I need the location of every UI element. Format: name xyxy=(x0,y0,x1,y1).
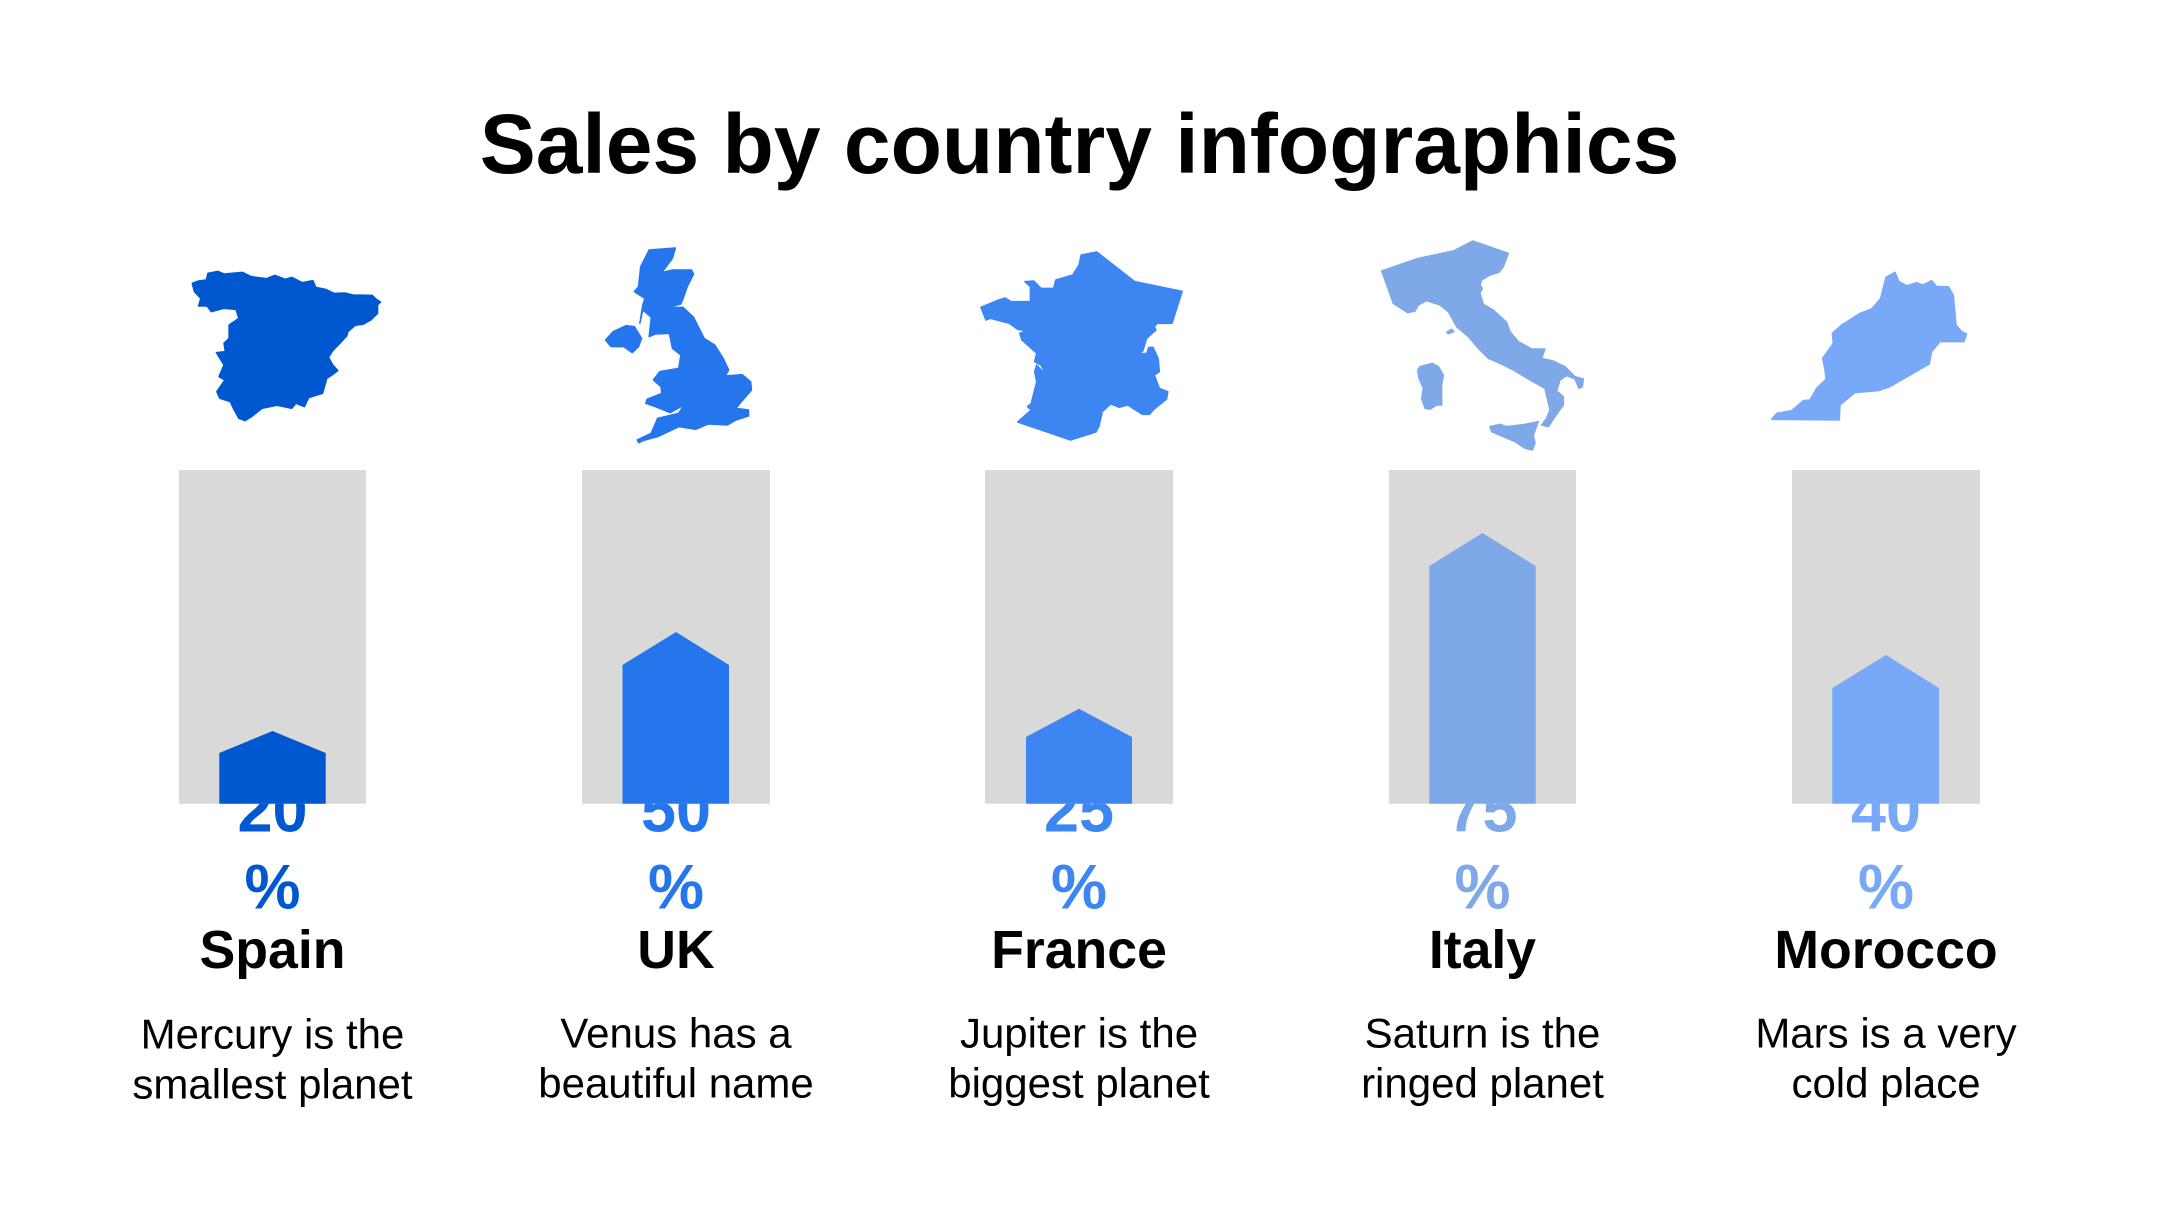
country name: Morocco xyxy=(1774,920,1998,980)
percentage value: 75%: 75 xyxy=(1447,776,1518,846)
description: cold place xyxy=(1791,1060,1981,1106)
description: smallest planet xyxy=(132,1060,413,1108)
bar: 20 percent xyxy=(219,731,326,804)
description: Mars is a very xyxy=(1755,1010,2017,1056)
bar track xyxy=(1389,470,1576,804)
country name: UK xyxy=(637,920,715,980)
panel: Morocco xyxy=(1755,272,2017,1106)
percentage value: 50%: % xyxy=(648,852,704,922)
country name: Italy xyxy=(1429,920,1536,980)
percentage value: 50% xyxy=(641,776,711,922)
bar: 25 percent xyxy=(1026,709,1132,804)
country name: France xyxy=(991,920,1167,980)
country name: Spain xyxy=(200,920,345,980)
panel: France xyxy=(948,252,1210,1106)
description: biggest planet xyxy=(948,1060,1210,1106)
panel: UK xyxy=(538,248,814,1107)
description: beautiful name xyxy=(538,1060,814,1106)
percentage value: 40% xyxy=(1851,776,1921,922)
description: Venus has a xyxy=(560,1010,792,1056)
percentage value: 20% xyxy=(237,776,308,922)
percentage value: 50%: 50 xyxy=(641,776,711,846)
description: Mercury is the xyxy=(141,1010,404,1058)
bar track xyxy=(1792,470,1980,804)
percentage value: 20%: 20 xyxy=(237,776,308,846)
description: Jupiter is the xyxy=(960,1010,1198,1056)
bar track xyxy=(179,470,366,804)
icon: map of UK xyxy=(606,248,752,443)
percentage value: 20%: % xyxy=(244,852,301,922)
icon: map of France xyxy=(981,252,1182,440)
bar track xyxy=(582,470,770,804)
bar track xyxy=(985,470,1173,804)
icon: map of Morocco xyxy=(1772,272,1967,420)
bar: 50 percent xyxy=(622,632,729,804)
icon: map of Italy xyxy=(1382,241,1583,450)
percentage value: 25%: % xyxy=(1051,852,1107,922)
panel: Spain xyxy=(132,271,413,1107)
percentage value: 75% xyxy=(1447,776,1518,922)
bar: 75 percent xyxy=(1429,533,1536,804)
percentage value: 40%: % xyxy=(1858,852,1914,922)
title: Sales by country infographics xyxy=(480,97,1679,191)
percentage value: 40%: 40 xyxy=(1851,776,1921,846)
panel: Italy xyxy=(1361,241,1604,1107)
percentage value: 25% xyxy=(1044,776,1114,922)
percentage value: 75%: % xyxy=(1454,852,1511,922)
description: Saturn is the xyxy=(1365,1010,1600,1056)
icon: map of Spain xyxy=(192,271,381,421)
percentage value: 25%: 25 xyxy=(1044,776,1114,846)
bar: 40 percent xyxy=(1832,655,1939,804)
description: ringed planet xyxy=(1361,1060,1604,1106)
